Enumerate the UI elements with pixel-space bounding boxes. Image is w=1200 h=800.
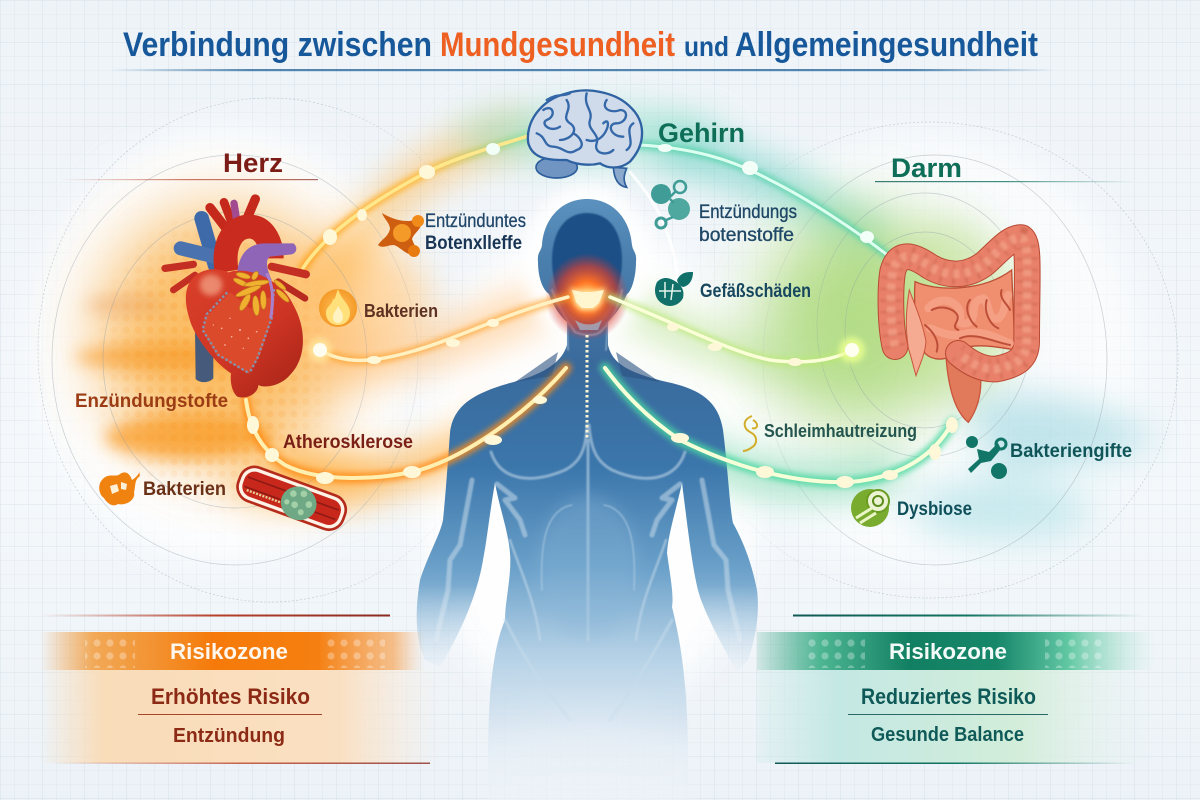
gut illustration bbox=[891, 238, 1027, 422]
icon: teal brain leaf bbox=[655, 272, 693, 306]
text: Entzündung: Entzündung bbox=[173, 725, 285, 747]
pathway beads bbox=[247, 143, 958, 488]
icon: orange bacteria blob bbox=[99, 472, 140, 505]
pathway: lower right to gut bbox=[605, 368, 952, 482]
label: Dysbiose: Dysbiose bbox=[897, 499, 972, 520]
label: Entzündungs: Entzündungs bbox=[699, 202, 797, 223]
text: Reduziertes Risiko: Reduziertes Risiko bbox=[861, 684, 1036, 709]
label: Bakterien upper: Bakterien bbox=[364, 301, 438, 321]
human body silhouette bbox=[417, 199, 758, 800]
label: Bakteriengifte: Bakteriengifte bbox=[1010, 441, 1132, 462]
concentric orbit rings bbox=[38, 98, 1178, 602]
heading: Herz: Herz bbox=[223, 148, 283, 178]
white halo around head bbox=[525, 184, 649, 340]
icon: toxin bacteria bbox=[966, 436, 1007, 479]
title: Verbindung zwischen bbox=[123, 26, 432, 64]
pathway: brain to gut bbox=[630, 145, 890, 280]
heading: Risikozone: Risikozone bbox=[889, 639, 1007, 664]
head: dark inner dome bbox=[552, 213, 622, 324]
icon: orange molecule star bbox=[378, 213, 424, 257]
pathway: mouth to heart and gut bbox=[320, 297, 852, 362]
label: Botenxlleffe: Botenxlleffe bbox=[425, 233, 522, 254]
title: Mundgesundheit bbox=[440, 26, 675, 64]
label: Atherosklerose: Atherosklerose bbox=[283, 432, 413, 453]
mouth glow bbox=[545, 253, 629, 341]
label: Entzünduntes: Entzünduntes bbox=[425, 211, 526, 232]
label: Bakterien lower: Bakterien bbox=[143, 479, 226, 500]
blood vessel with plaque bbox=[233, 463, 350, 535]
icon: teal molecules bbox=[651, 181, 690, 228]
text: Erhöhtes Risiko: Erhöhtes Risiko bbox=[151, 684, 310, 709]
panel: left risk zone bbox=[40, 614, 440, 764]
title: und bbox=[684, 31, 729, 62]
label: Gefäßschäden: Gefäßschäden bbox=[700, 281, 811, 302]
pathway: heart to brain bbox=[303, 136, 528, 268]
label: Enzündungstofte: Enzündungstofte bbox=[75, 391, 228, 412]
heading: Darm: Darm bbox=[891, 153, 962, 183]
title bbox=[110, 26, 1055, 71]
panel: right risk zone bbox=[757, 614, 1157, 764]
label group: right labels bbox=[651, 181, 1132, 527]
brain illustration bbox=[528, 90, 642, 187]
spine dotted line bbox=[586, 335, 588, 440]
colour glows behind diagram bbox=[24, 90, 1160, 690]
text: Gesunde Balance: Gesunde Balance bbox=[871, 724, 1024, 746]
title: Allgemeingesundheit bbox=[735, 26, 1038, 64]
body: muscle and bone lines bbox=[436, 288, 740, 661]
label: botenstoffe: botenstoffe bbox=[699, 225, 794, 246]
label: Schleimhautreizung: Schleimhautreizung bbox=[764, 421, 917, 441]
heart illustration bbox=[165, 199, 306, 398]
neck: dark shoulder triangles bbox=[515, 352, 660, 382]
label group: left labels bbox=[75, 211, 526, 505]
icon: green probe bbox=[851, 489, 889, 527]
heading: Gehirn: Gehirn bbox=[658, 118, 745, 148]
icon: yellow spiral bbox=[743, 416, 757, 451]
icon: flame bbox=[319, 289, 357, 327]
heading: Risikozone: Risikozone bbox=[170, 639, 288, 664]
pathway: lower left to vessel bbox=[246, 368, 566, 478]
